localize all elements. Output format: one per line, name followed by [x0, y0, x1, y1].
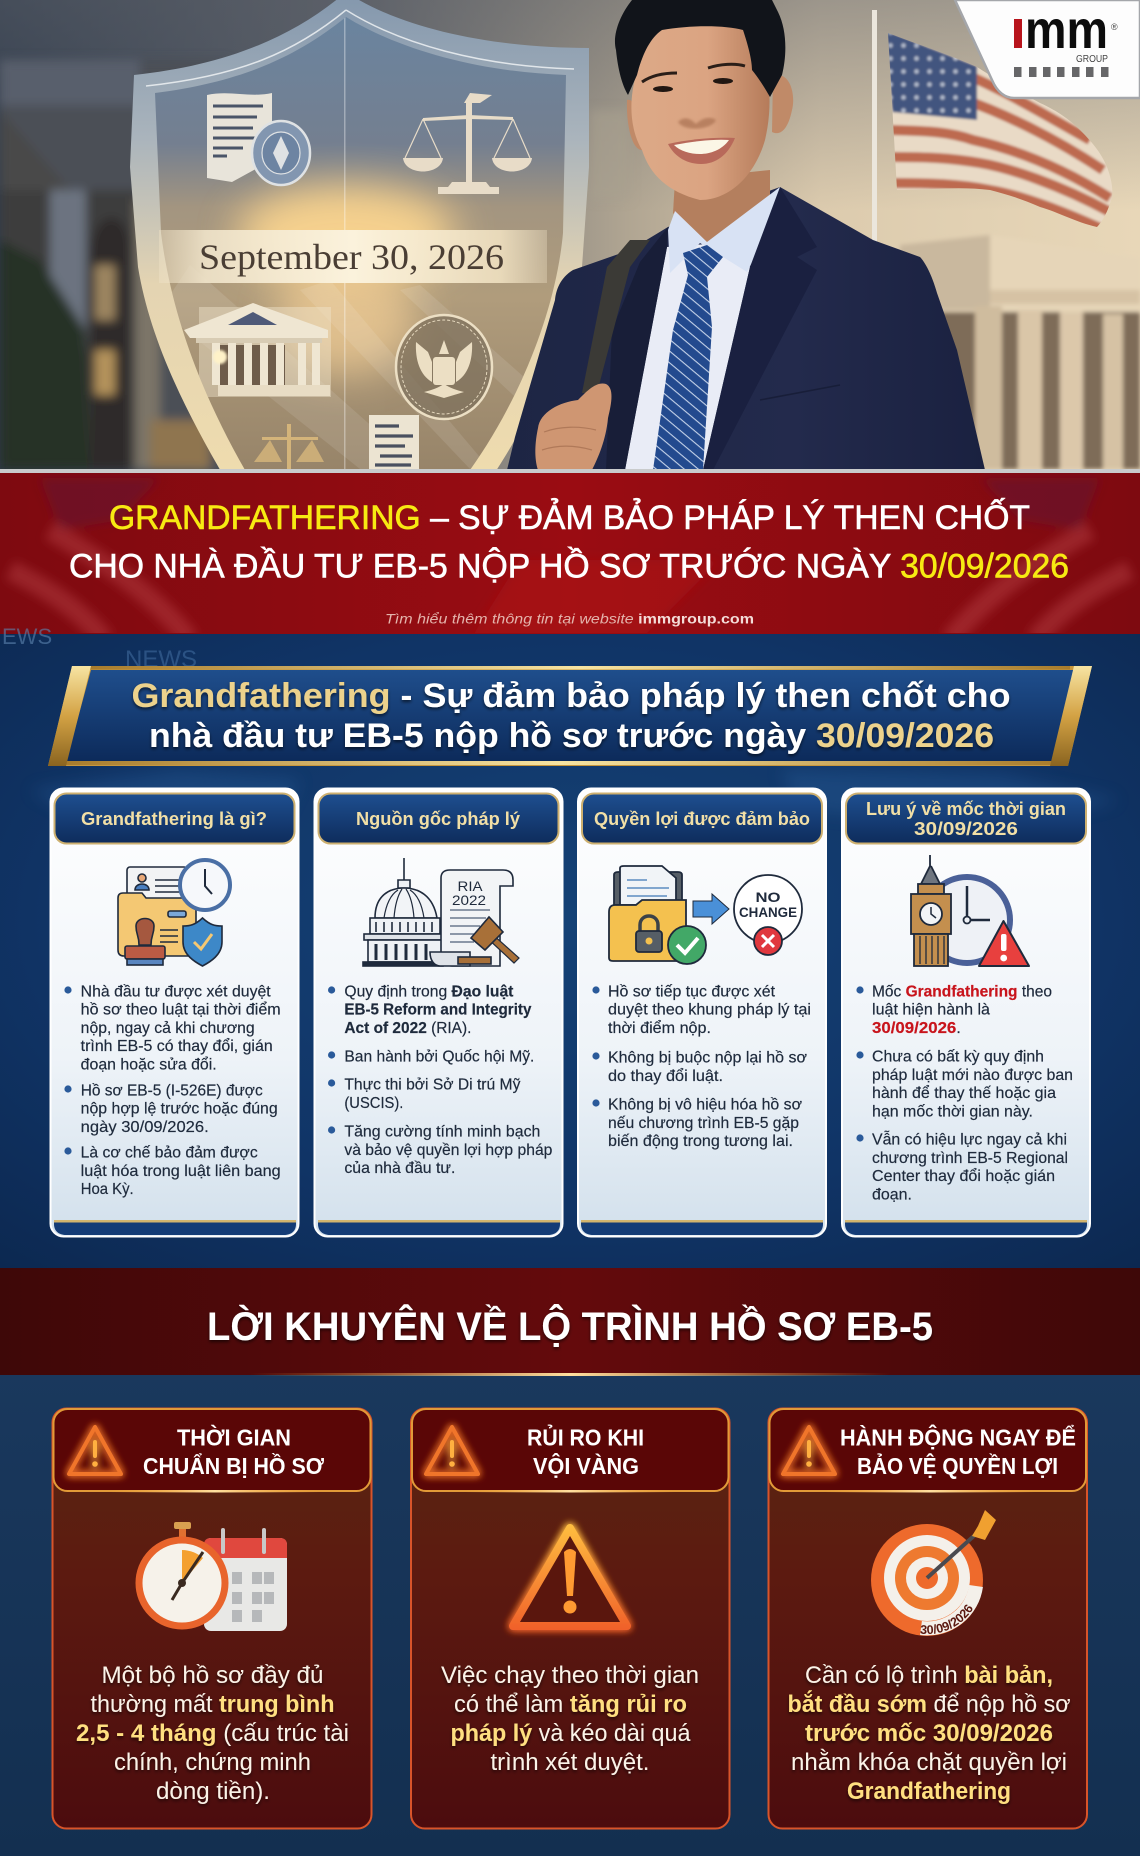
- bullets: nộp hợp lệ trước hoặc đúng: [81, 1101, 278, 1118]
- bag strap: [582, 240, 650, 393]
- section banner: [48, 666, 1092, 766]
- bullets: do thay đổi luật.: [608, 1067, 723, 1085]
- card header: 30/09/2026: [914, 819, 1018, 839]
- title line 1: GRANDFATHERING – SỰ ĐẢM BẢO PHÁP LÝ THEN CHỐT: [109, 498, 1030, 537]
- scales of justice: [403, 93, 532, 194]
- body text: bắt đầu sớm để nộp hồ sơ: [788, 1690, 1071, 1718]
- card header: BẢO VỆ QUYỀN LỢI: [857, 1451, 1058, 1479]
- bullets: Hoa Kỳ.: [81, 1181, 134, 1198]
- body text: pháp lý và kéo dài quá: [450, 1720, 691, 1747]
- banner title: Grandfathering - Sự đảm bảo pháp lý then chốt cho: [132, 677, 1010, 715]
- bullets: (USCIS).: [344, 1095, 403, 1112]
- bullets: Tăng cường tính minh bạch: [344, 1124, 540, 1140]
- bullets: hồ sơ theo luật tại thời điểm: [81, 1001, 281, 1019]
- bullets: Quy định trong Đạo luật: [344, 984, 513, 1000]
- tie: [653, 245, 723, 470]
- body text: Cần có lộ trình bài bản,: [805, 1662, 1053, 1689]
- icon: folder stamp clock shield: [118, 860, 230, 966]
- website note: Tìm hiểu thêm thông tin tại website immgroup.com: [385, 610, 754, 626]
- bullets: pháp luật mới nào được ban: [872, 1067, 1073, 1084]
- card header: Quyền lợi được đảm bảo: [594, 809, 810, 829]
- background temple right: [900, 235, 1140, 469]
- shield panels: [160, 10, 550, 475]
- advice heading band: LỜI KHUYÊN VỀ LỘ TRÌNH HỒ SƠ EB-5: [207, 1303, 933, 1349]
- body text: trình xét duyệt.: [490, 1749, 650, 1776]
- icon: target with arrow: 30/09/2026: [920, 1604, 972, 1634]
- card: Quyen loi duoc dam bao: [578, 788, 826, 1236]
- bullets: đoạn.: [872, 1186, 912, 1204]
- collar: [668, 187, 780, 273]
- banner title: nhà đầu tư EB-5 nộp hồ sơ trước ngày 30/09/2026: [149, 717, 994, 755]
- bullets: chương trình EB-5 Regional: [872, 1150, 1068, 1167]
- smile: [668, 138, 735, 164]
- flag folds: [10, 478, 1130, 640]
- card header: HÀNH ĐỘNG NGAY ĐỂ: [840, 1424, 1076, 1450]
- card header: [770, 1409, 1086, 1492]
- document with seal: [207, 93, 310, 185]
- bullets: Không bị vô hiệu hóa hồ sơ: [608, 1096, 802, 1114]
- businessman: [507, 0, 985, 470]
- bullets: Thực thi bởi Sở Di trú Mỹ: [344, 1076, 521, 1094]
- body text: có thể làm tăng rủi ro: [454, 1691, 687, 1718]
- bullets: Chưa có bất kỳ quy định: [872, 1048, 1044, 1066]
- advice heading band: [0, 1268, 1140, 1376]
- small scales: [254, 424, 324, 470]
- advice section: [0, 1268, 1140, 1856]
- red title band: [0, 469, 1140, 640]
- bullets: Act of 2022 (RIA).: [344, 1020, 471, 1037]
- bullets: Là cơ chế bảo đảm được: [81, 1144, 258, 1162]
- card header: [54, 794, 294, 844]
- nose: [678, 118, 716, 129]
- icon: capitol scroll gavel: [363, 858, 519, 966]
- card header: Nguồn gốc pháp lý: [356, 809, 520, 829]
- body text: 2,5 - 4 tháng (cấu trúc tài: [76, 1720, 349, 1747]
- bullets: luật hóa trong luật liên bang: [81, 1163, 281, 1180]
- bullets: nộp, ngay cả khi chương: [81, 1020, 255, 1037]
- card header: [582, 794, 822, 844]
- icon: warning: [783, 1427, 835, 1474]
- right lapel: [703, 187, 817, 470]
- shield: [130, 0, 589, 480]
- bullets: Vẫn có hiệu lực ngay cả khi: [872, 1130, 1067, 1148]
- logo: mm: [1025, 0, 1108, 60]
- faint news text: NEWS: [125, 646, 197, 673]
- bullets: Ban hành bởi Quốc hội Mỹ.: [344, 1048, 534, 1066]
- neck: [673, 170, 770, 246]
- bullets: thời điểm nộp.: [608, 1019, 711, 1037]
- card header: THỜI GIAN: [177, 1424, 291, 1450]
- courthouse: [184, 303, 331, 397]
- bullets: Nhà đầu tư được xét duyệt: [81, 984, 271, 1000]
- hero photo: [0, 0, 1140, 480]
- hair: [615, 0, 785, 97]
- card: Grandfathering la gi: [50, 788, 298, 1236]
- bullets: biến động trong tương lai.: [608, 1133, 793, 1150]
- icon: folder no change: NO: [756, 889, 781, 905]
- icon: capitol scroll gavel: RIA: [458, 878, 483, 894]
- body text: [788, 1662, 1071, 1805]
- bullets: EB-5 Reform and Integrity: [344, 1002, 532, 1019]
- bullets: Center thay đổi hoặc gián: [872, 1167, 1055, 1185]
- logo: ®: [1111, 22, 1118, 32]
- date band: [159, 230, 547, 283]
- bullets: Hồ sơ tiếp tục được xét: [608, 984, 776, 1000]
- bullets: hạn mốc thời gian này.: [872, 1104, 1033, 1120]
- bullets: ngày 30/09/2026.: [81, 1119, 209, 1136]
- bullets: trình EB-5 có thay đổi, gián: [81, 1037, 273, 1055]
- icon: capitol scroll gavel: 2022: [452, 892, 486, 908]
- world map glow: [30, 770, 1120, 860]
- body text: Grandfathering: [847, 1778, 1011, 1805]
- icon: target with arrow: [871, 1510, 996, 1636]
- icon: folder no change: CHANGE: [739, 904, 797, 920]
- bullets: Hồ sơ EB-5 (I-526E) được: [81, 1082, 263, 1100]
- card header: [412, 1409, 728, 1492]
- left lapel: [606, 227, 668, 470]
- pocket: [760, 385, 840, 400]
- title line 2: CHO NHÀ ĐẦU TƯ EB-5 NỘP HỒ SƠ TRƯỚC NGÀY 30/09/2026: [69, 548, 1069, 586]
- bullets: đoạn hoặc sửa đổi.: [81, 1056, 217, 1074]
- eyes and brows: [642, 64, 745, 92]
- small document: [369, 415, 419, 475]
- navy legal section: EWS: [2, 624, 52, 649]
- body text: [76, 1662, 349, 1805]
- icon: big ben clock warning: [911, 855, 1029, 966]
- bullets: [64, 984, 281, 1198]
- bullets: hành để thay thế hoặc gia: [872, 1084, 1056, 1102]
- advice card: hanh dong: [768, 1408, 1088, 1830]
- banner title: [132, 677, 1010, 755]
- body text: trước mốc 30/09/2026: [805, 1720, 1053, 1747]
- bullets: [592, 984, 811, 1150]
- date band: September 30, 2026: [199, 237, 504, 277]
- suit jacket: [507, 187, 985, 470]
- body text: [441, 1662, 699, 1776]
- ears: [627, 75, 793, 150]
- background building left: [0, 60, 630, 470]
- card header: [318, 794, 558, 844]
- flagpole: [872, 10, 877, 242]
- card header: RỦI RO KHI: [527, 1422, 644, 1450]
- bullets: luật hiện hành là: [872, 1002, 990, 1019]
- card: Nguon goc phap ly: [314, 788, 562, 1236]
- card header: CHUẨN BỊ HỒ SƠ: [143, 1452, 324, 1479]
- navy legal section: [0, 624, 1140, 1268]
- body text: dòng tiền).: [156, 1778, 270, 1805]
- logo: [955, 0, 1140, 98]
- body text: Một bộ hồ sơ đầy đủ: [102, 1662, 324, 1689]
- bullets: và bảo vệ quyền lợi hợp pháp: [344, 1142, 553, 1159]
- card header: [54, 1409, 370, 1492]
- card: Luu y ve moc thoi gian: [842, 788, 1090, 1236]
- icon: folder no change: [609, 866, 802, 964]
- shirt: [625, 244, 750, 470]
- logo: GROUP: [1076, 54, 1108, 65]
- icon: stopwatch and calendar: [139, 1522, 287, 1631]
- card header: VỘI VÀNG: [533, 1452, 639, 1479]
- body text: nhằm khóa chặt quyền lợi: [791, 1749, 1067, 1776]
- head: [631, 25, 770, 200]
- advice card: thoi gian: [52, 1408, 372, 1828]
- card header: Lưu ý về mốc thời gian: [866, 799, 1066, 819]
- icon: large warning triangle: [513, 1528, 627, 1626]
- fist: [535, 383, 612, 470]
- bullets: nếu chương trình EB-5 gặp: [608, 1115, 799, 1132]
- icon: warning: [426, 1427, 478, 1474]
- advice card: rui ro: [411, 1408, 730, 1828]
- body text: thường mất trung bình: [90, 1691, 334, 1718]
- card header: Grandfathering là gì?: [81, 809, 267, 829]
- body text: chính, chứng minh: [114, 1749, 311, 1776]
- bullets: Mốc Grandfathering theo: [872, 984, 1052, 1000]
- bullets: [856, 984, 1073, 1204]
- icon: warning: [69, 1427, 121, 1474]
- bullets: duyệt theo khung pháp lý tại: [608, 1002, 811, 1019]
- bullets: [328, 984, 553, 1177]
- eagle seal: [396, 315, 492, 419]
- american flag: [888, 33, 1112, 227]
- card header: [846, 794, 1086, 844]
- body text: Việc chạy theo thời gian: [441, 1662, 699, 1689]
- bullets: của nhà đầu tư.: [344, 1160, 455, 1177]
- bullets: Không bị buộc nộp lại hồ sơ: [608, 1050, 807, 1066]
- bullets: 30/09/2026 .: [872, 1020, 961, 1037]
